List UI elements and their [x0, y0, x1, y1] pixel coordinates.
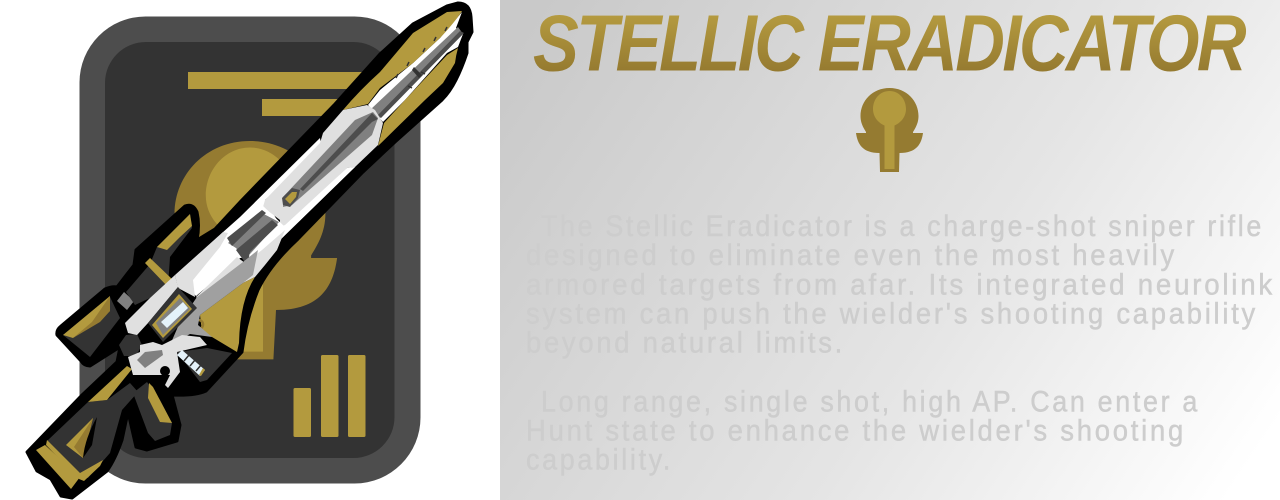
bar chart: stat bars [294, 355, 366, 437]
icon: card emblem [163, 141, 337, 359]
panel: weapon card [80, 16, 420, 484]
lower barrel blade [378, 48, 458, 146]
text block: description: beyond natural limits. [526, 326, 845, 360]
charge cells [177, 350, 205, 376]
gold rivet [194, 320, 203, 329]
icon: sniper rifle [27, 3, 472, 498]
scope [63, 214, 192, 357]
receiver window [125, 250, 258, 345]
gold underside [200, 277, 255, 352]
grip [133, 382, 172, 441]
text block: stats summary: Long range, single shot, high AP. Can enter a [541, 386, 1200, 418]
trigger assembly [128, 335, 232, 388]
barrel white backing [368, 12, 463, 122]
icon: faction emblem [856, 88, 923, 172]
text block: stats summary: capability. [526, 444, 673, 476]
barrel [370, 27, 464, 118]
text block: stats summary: Hunt state to enhance the wielder's shooting [526, 414, 1186, 448]
text block: stats summary [526, 386, 1200, 476]
stock [36, 366, 138, 489]
text block: description [526, 210, 1275, 360]
upper barrel blade [343, 11, 462, 110]
text block: description: designed to eliminate even the most heavily [526, 239, 1177, 272]
receiver body [175, 105, 383, 305]
panel: description background [500, 0, 1280, 500]
